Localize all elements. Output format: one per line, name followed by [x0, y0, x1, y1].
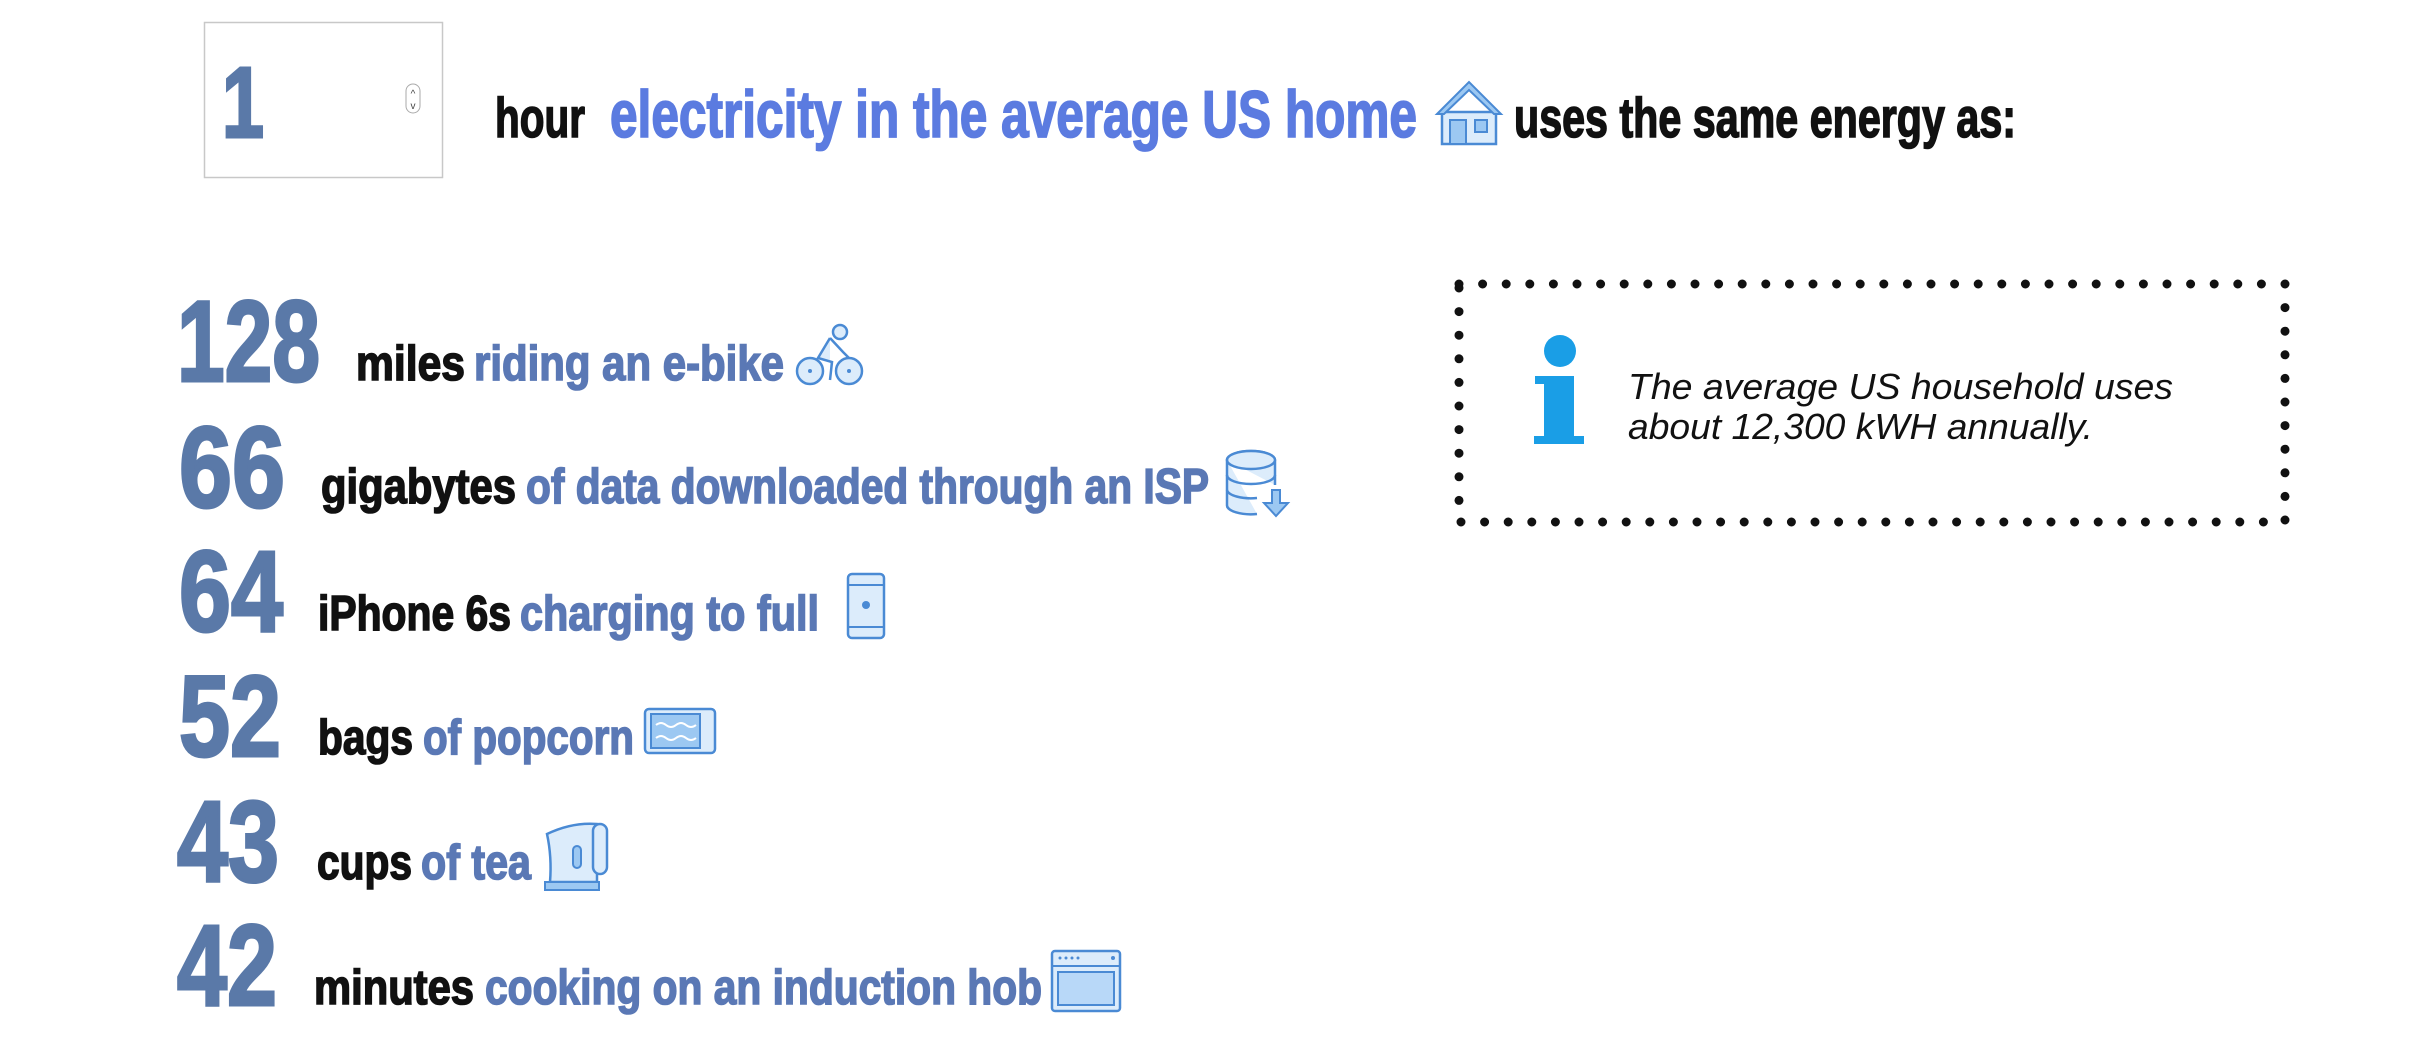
- row: popcorn: 52: [179, 653, 281, 781]
- row: iPhone: 64: [179, 528, 283, 656]
- icon: kettle: [545, 824, 607, 890]
- row: popcorn: of popcorn: [423, 711, 634, 765]
- row: induction hob: minutes: [314, 961, 474, 1015]
- row: data: of data downloaded through an ISP: [526, 460, 1209, 514]
- icon: oven: [1052, 951, 1120, 1011]
- row: iPhone: [179, 528, 884, 656]
- row: popcorn: bags: [318, 711, 413, 765]
- info callout: [1459, 284, 2285, 522]
- row: tea: [177, 778, 607, 906]
- heading: hour: [495, 86, 585, 149]
- icon: house: [1437, 82, 1501, 144]
- row: tea: of tea: [421, 836, 532, 890]
- icon: bicycle: [797, 325, 862, 384]
- row: induction hob: 42: [177, 902, 277, 1030]
- row: tea: 43: [177, 778, 279, 906]
- row: induction hob: cooking on an induction hob: [485, 961, 1042, 1015]
- row: e-bike: [177, 278, 862, 406]
- row: data: 66: [179, 404, 285, 532]
- row: popcorn: [179, 653, 715, 781]
- icon: phone: [848, 574, 884, 638]
- callout text: The average US household uses: [1628, 366, 2173, 407]
- row: data: [179, 404, 1288, 532]
- row: e-bike: 128: [177, 278, 320, 406]
- input box: hours: v: [410, 101, 416, 112]
- info callout: about 12,300 kWH annually.: [1628, 406, 2093, 447]
- icon: info i: [1534, 335, 1584, 444]
- row: e-bike: riding an e-bike: [474, 337, 784, 391]
- row: induction hob: [177, 902, 1120, 1030]
- row: iPhone: iPhone 6s: [318, 587, 511, 641]
- input box: hours: 1: [222, 47, 264, 159]
- row: e-bike: miles: [356, 337, 465, 391]
- heading: electricity in the average US home: [610, 77, 1417, 151]
- input box: hours: ^: [411, 89, 416, 100]
- input box: hours: [204, 22, 442, 178]
- icon: microwave: [645, 709, 715, 753]
- row: iPhone: charging to full: [520, 587, 819, 641]
- row: data: gigabytes: [321, 460, 516, 514]
- heading: uses the same energy as:: [1514, 86, 2016, 149]
- icon: database download: [1227, 451, 1288, 516]
- row: tea: cups: [317, 836, 412, 890]
